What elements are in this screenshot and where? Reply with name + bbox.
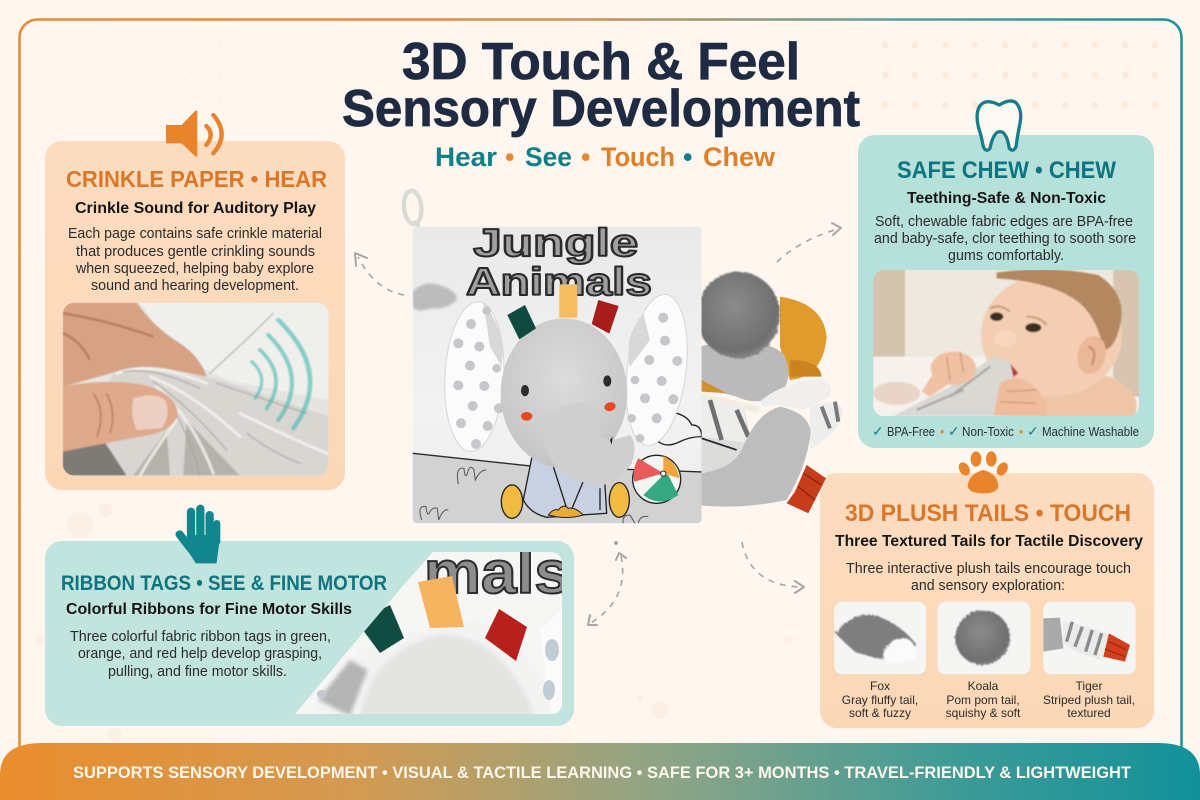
footer text: SUPPORTS SENSORY DEVELOPMENT • VISUAL & TACTILE LEARNING • SAFE FOR 3+ MONTHS • TRAVEL-FRIENDLY & LIGHTWEIGHT (73, 763, 1132, 782)
subtitle: Hear See Touch Chew: Hear (435, 142, 497, 172)
panel: ribbon tags see and fine motor (45, 509, 574, 726)
subheading: Crinkle Sound for Auditory Play (75, 200, 316, 217)
body text: gums comfortably. (948, 248, 1064, 264)
photo: baby chewing fabric (873, 270, 1139, 416)
subtitle: Hear See Touch Chew: • (505, 142, 514, 172)
heading: RIBBON TAGS • SEE & FINE MOTOR (61, 572, 387, 595)
subtitle: Hear See Touch Chew: Chew (703, 142, 776, 172)
thumbnail: fox tail (834, 602, 926, 674)
safety checklist: BPA-Free (887, 425, 935, 439)
heading: 3D PLUSH TAILS • TOUCH (845, 500, 1131, 527)
book title: Jungle (473, 221, 638, 265)
body text: when squeezed, helping baby explore (75, 261, 314, 277)
book title: Animals (466, 260, 652, 304)
captions: soft & fuzzy (849, 706, 911, 720)
safety checklist: • (940, 425, 944, 439)
arrow: book to plush tails panel (742, 542, 804, 593)
icon: paw (956, 451, 1010, 493)
body text: pulling, and fine motor skills. (108, 664, 287, 680)
body text: and sensory exploration: (911, 578, 1065, 594)
body text (70, 629, 331, 680)
body text: orange, and red help develop grasping, (78, 646, 322, 662)
panel: 3D plush tails (820, 451, 1154, 728)
subtitle: Hear See Touch Chew: • (683, 142, 692, 172)
title (342, 33, 860, 138)
subtitle: Hear See Touch Chew: See (525, 142, 572, 172)
captions: Pom pom tail, (946, 693, 1020, 707)
safety checklist: • (1019, 425, 1023, 439)
body text: and baby-safe, clor teething to sooth sore (874, 231, 1136, 247)
icon: tooth (977, 101, 1021, 150)
arrow: book to safe chew panel (777, 223, 841, 262)
arrow: book to ribbon panel (588, 541, 626, 625)
safety checklist: Non-Toxic (962, 425, 1014, 439)
captions (842, 679, 1135, 720)
thumbnail: koala tail (938, 602, 1030, 674)
title: 3D Touch & Feel (402, 33, 800, 91)
hanging loop (402, 190, 423, 227)
book title (466, 226, 652, 296)
body text: Three colorful fabric ribbon tags in green, (70, 629, 331, 645)
panel: safe chew (858, 101, 1154, 448)
captions: Gray fluffy tail, (842, 693, 918, 707)
captions: Koala (968, 679, 999, 693)
body text: Three interactive plush tails encourage touch (846, 561, 1131, 577)
body text: sound and hearing development. (91, 278, 299, 294)
subheading: Three Textured Tails for Tactile Discovery (835, 533, 1143, 550)
beach ball (633, 455, 681, 503)
body text: Soft, chewable fabric edges are BPA-free (875, 214, 1133, 230)
safety checklist: ✓ (1027, 423, 1039, 439)
photo: ribbon closeup: mals (424, 539, 570, 606)
safety checklist: ✓ (948, 423, 960, 439)
subtitle: Hear See Touch Chew: Touch (601, 142, 675, 172)
captions: Striped plush tail, (1043, 693, 1135, 707)
heading: SAFE CHEW • CHEW (897, 157, 1116, 184)
ears (441, 291, 695, 453)
panel: crinkle paper hear (45, 110, 345, 490)
safety checklist: ✓ (872, 423, 884, 439)
product: Jungle Animals cloth book (402, 190, 843, 523)
tails behind book (697, 272, 843, 513)
thumbnail: tiger tail (1043, 602, 1136, 674)
body text: that produces gentle crinkling sounds (76, 244, 315, 260)
captions: Tiger (1076, 679, 1102, 693)
elephant head (501, 318, 635, 485)
arrow: book to crinkle panel (355, 253, 404, 295)
subheading: Colorful Ribbons for Fine Motor Skills (66, 601, 352, 618)
safety checklist (872, 423, 1139, 439)
captions: textured (1067, 706, 1111, 720)
photo: ribbon closeup (295, 552, 562, 714)
subheading: Teething-Safe & Non-Toxic (907, 190, 1106, 207)
subtitle: Hear See Touch Chew (435, 142, 776, 172)
ribbon tags (507, 284, 619, 339)
photo: hand crinkling fabric (63, 303, 329, 476)
subtitle: Hear See Touch Chew: • (581, 142, 590, 172)
captions: Fox (870, 679, 890, 693)
body text (68, 226, 322, 294)
captions: squishy & soft (946, 706, 1021, 720)
body text (874, 214, 1136, 264)
heading: CRINKLE PAPER • HEAR (66, 166, 327, 192)
footer banner (0, 743, 1200, 800)
title: Sensory Development (342, 80, 860, 138)
body text (846, 561, 1131, 594)
book page (413, 221, 702, 523)
icon: speaker (166, 110, 222, 157)
body text: Each page contains safe crinkle material (68, 226, 322, 242)
icon: hand (180, 509, 220, 563)
safety checklist: Machine Washable (1042, 425, 1139, 439)
body and feet (501, 450, 629, 518)
ground doodles (420, 413, 702, 523)
